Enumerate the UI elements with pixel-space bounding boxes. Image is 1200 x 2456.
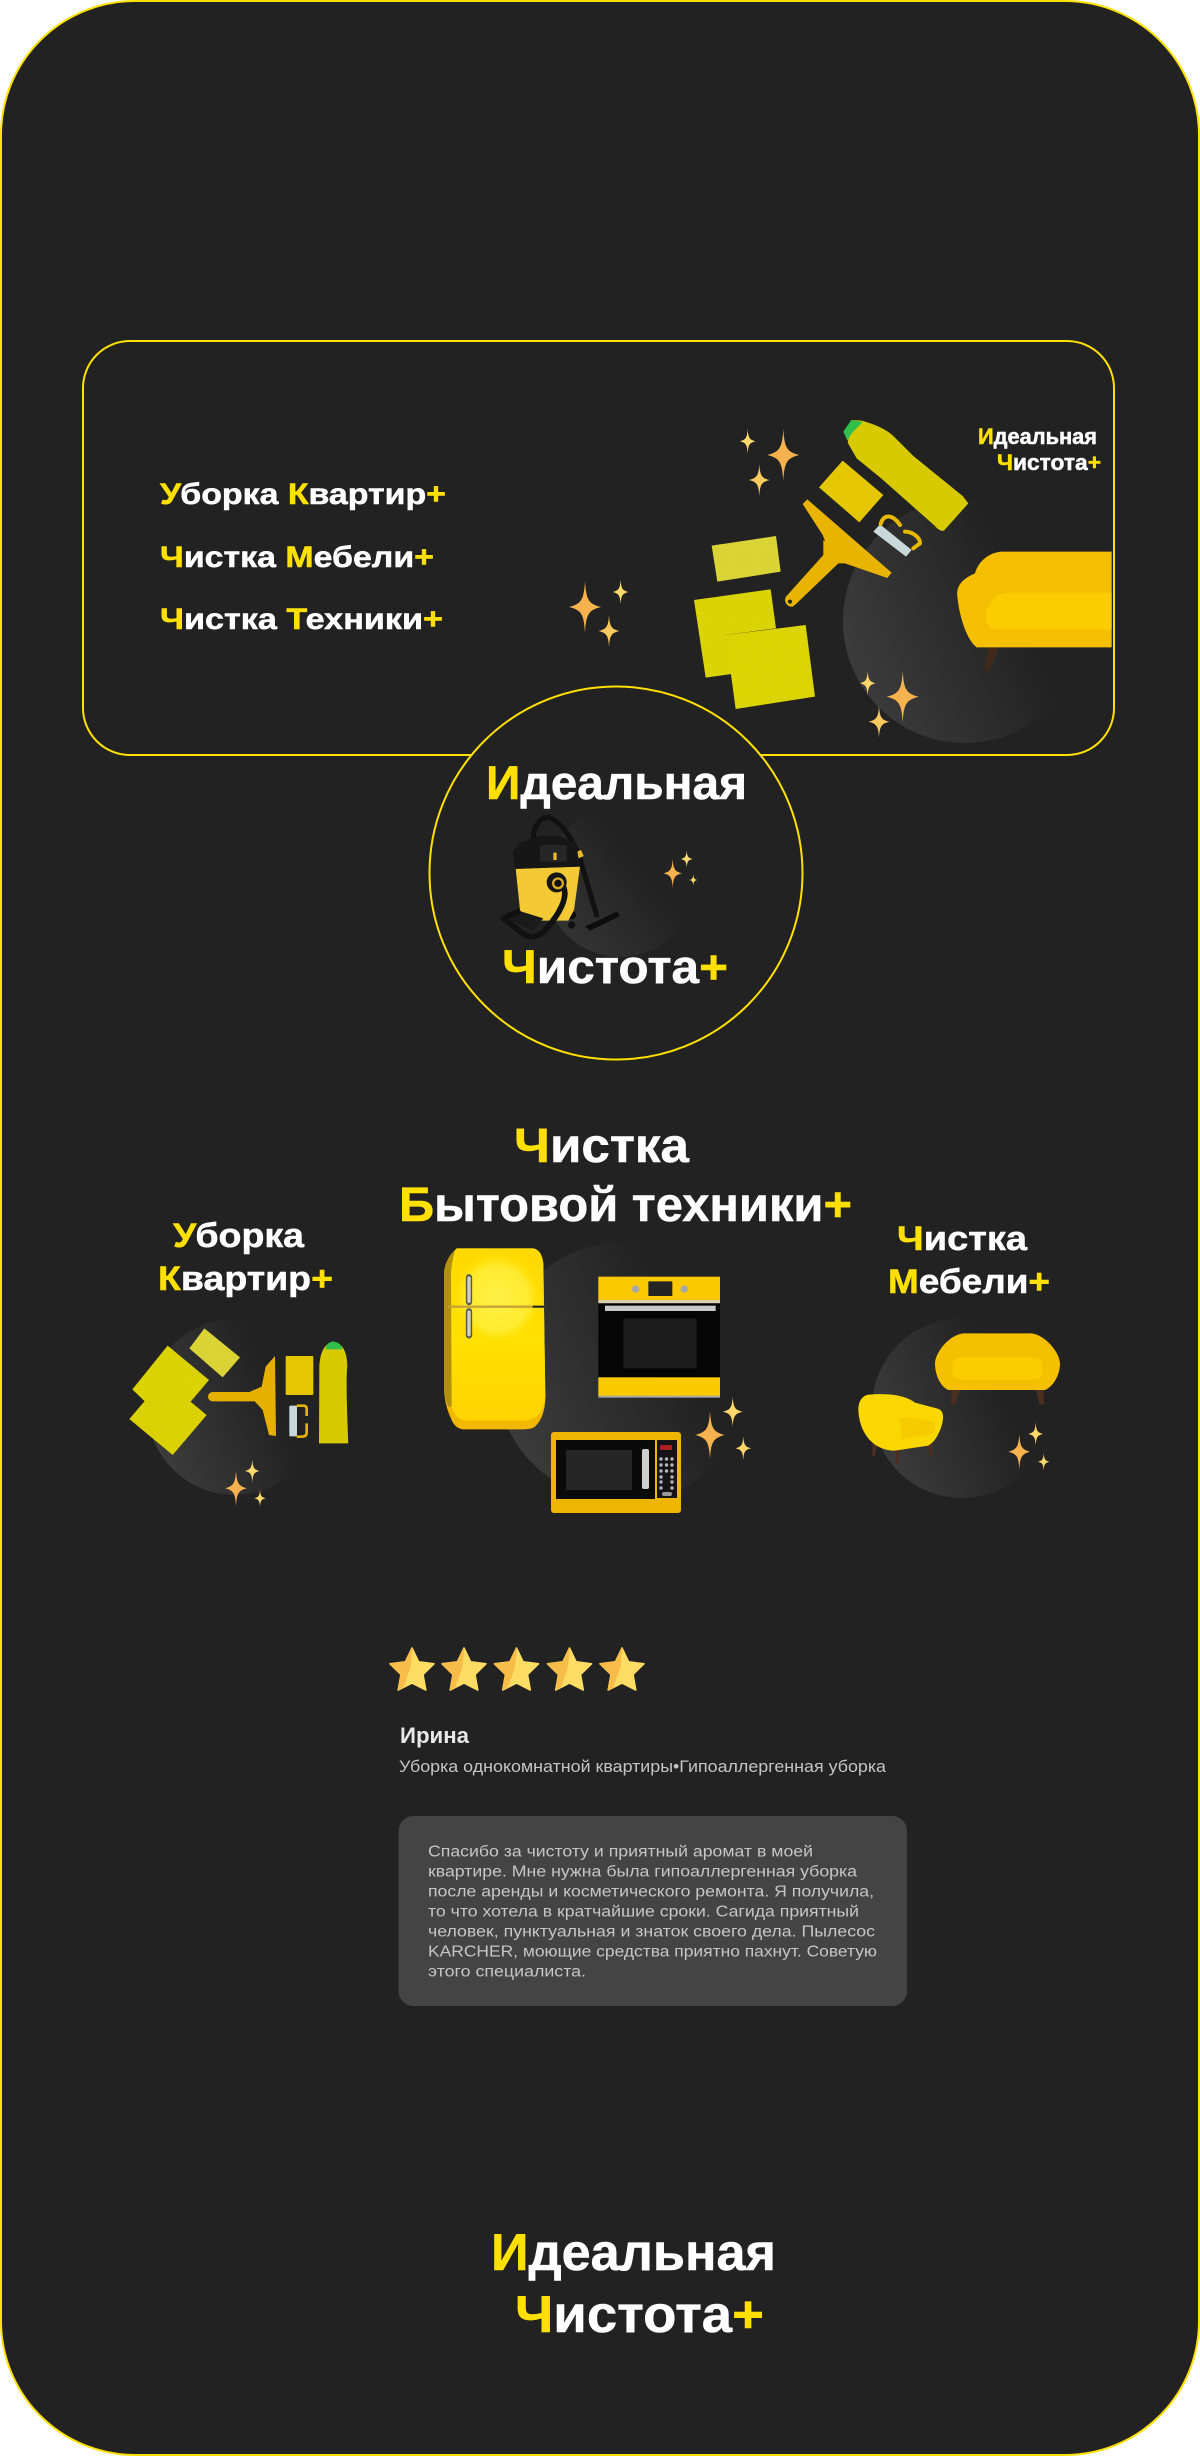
icon: vacuum cleaner [503, 817, 620, 937]
icon: scrub brush [289, 1406, 307, 1437]
review text: этого специалиста. [428, 1964, 586, 1980]
icon: armchair [858, 1394, 943, 1464]
backdrop circle [147, 1319, 323, 1495]
heading: Чистка [897, 1220, 1028, 1258]
small brand title: Идеальная [978, 424, 1097, 449]
heading: Уборка [173, 1217, 305, 1255]
icon: cloth front [129, 1379, 207, 1455]
service: apartment cleaning [129, 1217, 348, 1507]
icon: sponge [286, 1356, 313, 1395]
icon: detergent bottle [319, 1342, 348, 1443]
badge title bottom: Чистота+ [502, 940, 728, 993]
heading [399, 1120, 852, 1232]
sparkles [1008, 1422, 1049, 1471]
sparkles [695, 1397, 751, 1460]
furniture illustration [858, 1333, 1060, 1464]
icon: squeegee [785, 499, 892, 607]
review text: после аренды и косметического ремонта. Я получила, [428, 1884, 874, 1900]
badge: brand circle [430, 686, 802, 1060]
backdrop circle [495, 1242, 755, 1502]
icon: yellow fridge [444, 1248, 545, 1429]
sparkles [663, 850, 697, 888]
review text: человек, пунктуальная и знаток своего дела. Пылесос [428, 1924, 875, 1940]
cleaning supplies illustration [694, 420, 1112, 709]
footer brand title: Чистота+ [515, 2286, 764, 2344]
review text [428, 1844, 877, 1980]
icon: porous sponge [712, 536, 781, 582]
small brand title: Чистота+ [997, 450, 1101, 475]
sparkles bottom [860, 671, 919, 738]
review block [390, 1648, 907, 2006]
badge backdrop [545, 807, 695, 957]
heading: Мебели + [888, 1263, 1050, 1301]
reviewer name: Ирина [400, 1723, 470, 1748]
icon: sofa [935, 1333, 1060, 1405]
icon: microwave [551, 1432, 681, 1513]
icon: squeegee [213, 1356, 276, 1436]
icon: detergent bottle [843, 420, 968, 531]
heading [888, 1220, 1050, 1301]
icon: cloth back [132, 1346, 209, 1402]
icon: built-in oven [598, 1277, 720, 1398]
list item: appliance cleaning: Чистка Техники + [160, 603, 443, 636]
list item: furniture cleaning: Чистка Мебели + [160, 541, 434, 574]
review card [398, 1816, 907, 2006]
icon: scrub brush [873, 516, 920, 557]
icon: sponge [819, 461, 883, 522]
review text: то что хотела в кратчайшие сроки. Сагида приятный [428, 1904, 859, 1920]
card background [398, 1816, 907, 2006]
badge outline [430, 686, 802, 1060]
heading: Чистка [514, 1120, 689, 1173]
icon: porous sponge [189, 1328, 240, 1377]
five star rating [390, 1648, 644, 1690]
sparkles left [569, 580, 629, 647]
panel: services banner [83, 341, 1114, 755]
footer brand title [491, 2224, 776, 2344]
badge title top: Идеальная [486, 756, 747, 809]
heading [158, 1217, 333, 1298]
service details: Уборка однокомнатной квартиры•Гипоаллергенная уборка [399, 1758, 887, 1776]
review text: Спасибо за чистоту и приятный аромат в моей [428, 1844, 813, 1860]
footer brand title: Идеальная [491, 2224, 776, 2282]
heading: Квартир + [158, 1260, 333, 1298]
review text: квартире. Мне нужна была гипоаллергенная уборка [428, 1864, 857, 1880]
icon: cloth back [694, 589, 776, 678]
sparkles top [740, 429, 799, 496]
icon: cloth front [726, 625, 815, 709]
sparkles [225, 1459, 266, 1507]
cleaning supplies flat lay [129, 1328, 348, 1455]
service: furniture cleaning [858, 1220, 1060, 1498]
review text: KARCHER, моющие средства приятно пахнут. Советую [428, 1944, 877, 1960]
service list [160, 478, 446, 636]
icon: yellow sofa [957, 552, 1112, 672]
backdrop circle [843, 499, 1087, 743]
service: appliance cleaning [399, 1120, 852, 1513]
small brand title [978, 424, 1101, 475]
heading: Бытовой техники+ [399, 1179, 852, 1232]
backdrop circle [872, 1318, 1052, 1498]
panel outline [83, 341, 1114, 755]
list item: apartment cleaning: Уборка Квартир + [160, 478, 446, 511]
